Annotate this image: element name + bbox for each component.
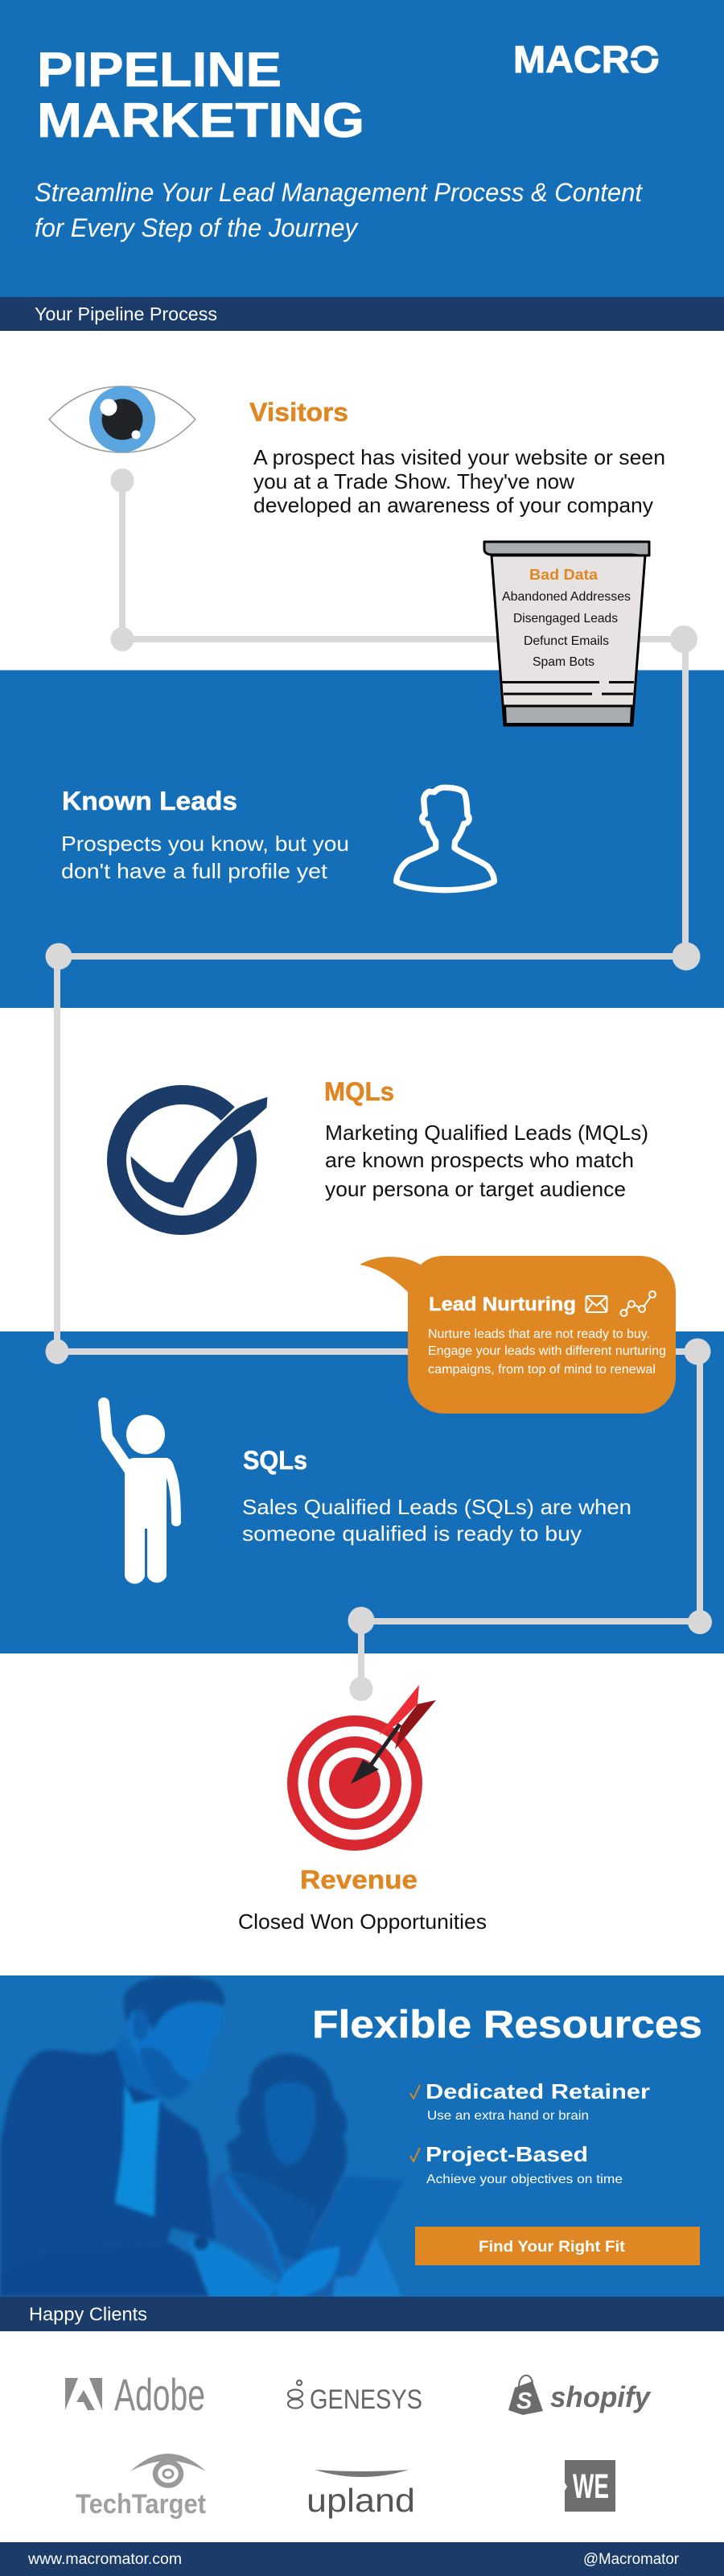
panel: Known Leads (0, 670, 724, 1008)
icon: nodes graph (621, 1291, 656, 1316)
title (37, 43, 364, 147)
icon: person raising hand (104, 1403, 181, 1583)
title: MARKETING (37, 93, 364, 147)
text: Visitors description: developed an awareness of your company (253, 493, 653, 517)
item: Dedicated Retainer: Dedicated Retainer (426, 2079, 650, 2103)
footer: @Macromator (583, 2551, 680, 2568)
icon: envelope (586, 1296, 607, 1312)
callout: Bad Data cup (484, 542, 649, 725)
logo: Shopify: S (516, 2388, 533, 2414)
text: MQLs description: your persona or target audience (325, 1177, 626, 1201)
text: Lead Nurturing description (428, 1327, 666, 1377)
heading: Flexible Resources: Flexible Resources (312, 2004, 702, 2046)
photo: two people with tablet (0, 1975, 404, 2297)
text: Known Leads description: Prospects you know, but you (61, 832, 349, 856)
logo: upland (306, 2470, 415, 2519)
logo: WE (565, 2460, 615, 2512)
panel: MQLs (117, 1077, 648, 1225)
section bar: Happy Clients (0, 2297, 724, 2331)
text: MQLs description: are known prospects who match (325, 1148, 634, 1172)
logo: TechTarget: TechTarget (76, 2489, 206, 2520)
heading: SQLs: SQLs (243, 1446, 307, 1475)
subtitle: Streamline Your Lead Management Process & Content (35, 178, 643, 207)
logo: TechTarget (76, 2454, 206, 2520)
callout: Lead Nurturing (360, 1256, 676, 1414)
text: Revenue description: Closed Won Opportunities (238, 1909, 487, 1934)
text: Lead Nurturing description: campaigns, from top of mind to renewal (428, 1363, 656, 1377)
text: Known Leads description (61, 832, 349, 883)
section bar: Happy Clients: Happy Clients (29, 2304, 147, 2325)
logo: Shopify (508, 2376, 652, 2415)
callout: Bad Data cup: Spam Bots (533, 655, 594, 669)
footer: www.macromator.com (27, 2551, 182, 2568)
item: Project-Based (410, 2142, 623, 2186)
button: Find Your Right Fit (415, 2227, 700, 2265)
text: Known Leads description: don't have a full profile yet (61, 859, 328, 883)
item: Dedicated Retainer: Use an extra hand or brain (427, 2109, 589, 2123)
subtitle (35, 178, 643, 242)
text: SQLs description: someone qualified is ready to buy (242, 1521, 582, 1546)
heading: Revenue: Revenue (300, 1865, 418, 1894)
footer (0, 2542, 724, 2576)
heading: MQLs: MQLs (324, 1077, 394, 1106)
item: Dedicated Retainer (410, 2079, 650, 2123)
icon: check mark in ring (117, 1095, 268, 1225)
text: Visitors description: A prospect has visited your website or seen (253, 445, 665, 469)
logo: upland: upland (306, 2482, 415, 2519)
text: Visitors description: you at a Trade Show. They've now (253, 469, 574, 493)
item: Project-Based: Project-Based (426, 2142, 588, 2166)
logo: Shopify: shopify (550, 2380, 652, 2413)
panel: Revenue (238, 1685, 487, 1934)
logo: Macro: MACRO (513, 38, 660, 80)
icon: target with arrow (287, 1685, 436, 1851)
text: MQLs description (325, 1121, 648, 1201)
logo: WE: WE (573, 2467, 609, 2506)
panel: SQLs (0, 1331, 724, 1653)
heading: Visitors: Visitors (249, 398, 348, 427)
subtitle: for Every Step of the Journey (35, 213, 359, 242)
heading: Known Leads: Known Leads (62, 786, 237, 815)
icon: person outline (397, 787, 494, 890)
button: Find Your Right Fit: Find Your Right Fit (479, 2239, 626, 2256)
icon: eye (49, 386, 195, 452)
logo: Adobe (65, 2369, 205, 2420)
text: Lead Nurturing description: Engage your leads with different nurturing (428, 1344, 666, 1358)
panel: Flexible Resources (0, 1975, 724, 2297)
callout: Bad Data cup: Defunct Emails (524, 634, 609, 648)
text: SQLs description: Sales Qualified Leads (SQLs) are when (242, 1495, 631, 1519)
logo: Adobe: Adobe (114, 2369, 205, 2420)
item: Project-Based: Achieve your objectives on time (426, 2173, 623, 2186)
logo: Genesys (288, 2380, 422, 2415)
logo: Genesys: GENESYS (310, 2384, 422, 2415)
callout: Bad Data cup: Bad Data (529, 567, 599, 583)
title: PIPELINE (37, 43, 282, 97)
panel: Visitors (49, 386, 665, 517)
section bar: Your Pipeline Process (0, 297, 724, 331)
section bar: Your Pipeline Process: Your Pipeline Process (35, 303, 217, 324)
text: SQLs description (242, 1495, 631, 1546)
pipeline connector (45, 469, 712, 1701)
callout: Bad Data cup: Disengaged Leads (513, 612, 618, 625)
text: Visitors description (253, 445, 665, 517)
callout: Lead Nurturing: Lead Nurturing (429, 1294, 576, 1315)
panel: header (0, 0, 724, 297)
callout: Bad Data cup: Abandoned Addresses (502, 590, 631, 604)
text: MQLs description: Marketing Qualified Leads (MQLs) (325, 1121, 648, 1145)
text: Lead Nurturing description: Nurture leads that are not ready to buy. (428, 1327, 650, 1341)
